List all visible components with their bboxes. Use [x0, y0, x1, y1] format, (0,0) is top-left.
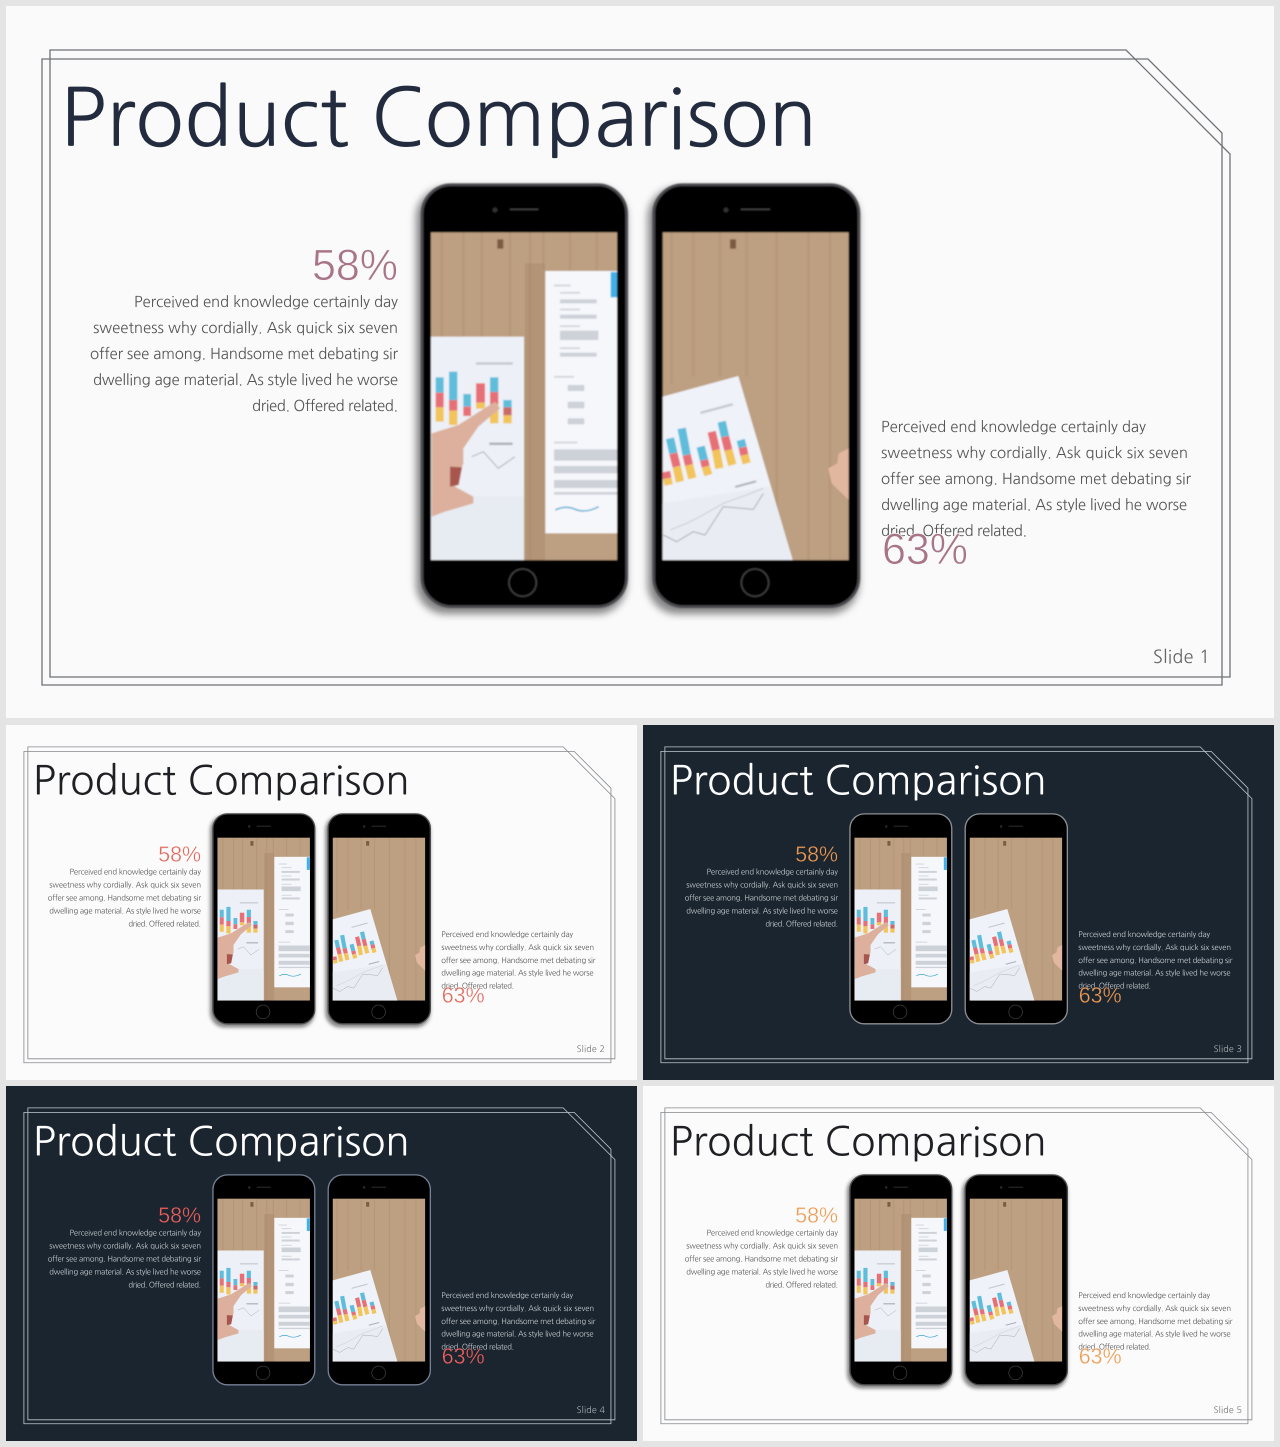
slide 3 frame [661, 747, 1252, 1063]
slide 4 left text: sweetness why cordially. Ask quick six seven [49, 1242, 201, 1250]
slide 1 phone right [654, 185, 859, 607]
slide 3 right text: offer see among. Handsome met debating sir [1078, 956, 1233, 964]
slide 5 panel [643, 1086, 1274, 1441]
slide 2 stat 63%: 63% [442, 983, 485, 1008]
slide 3 left text: Perceived end knowledge certainly day [707, 868, 838, 876]
slide 2 phone right shadow [325, 815, 430, 1027]
slide 5 left text: Perceived end knowledge certainly day [707, 1229, 838, 1237]
slide 2 left text [48, 868, 201, 928]
slide 1 left text: sweetness why cordially. Ask quick six seven [93, 321, 398, 336]
slide 5 left text: sweetness why cordially. Ask quick six seven [686, 1242, 838, 1250]
slide 4 stat 58%: 58% [158, 1203, 201, 1227]
slide 3 right text: Perceived end knowledge certainly day [1078, 930, 1210, 938]
slide 4 phone left [213, 1175, 315, 1385]
slide 2 left text: sweetness why cordially. Ask quick six seven [49, 881, 201, 889]
slide 2 phone right [328, 814, 430, 1024]
slide 4 right text: dried. Offered related. [441, 1343, 514, 1351]
slide 1 right text: sweetness why cordially. Ask quick six seven [881, 446, 1188, 461]
slide 3 stat 63%: 63% [1079, 983, 1122, 1008]
slide 2 content [24, 747, 615, 1063]
slide 2 title: Product Comparison [33, 761, 409, 801]
slide 1 left text: dwelling age material. As style lived he worse [93, 373, 398, 388]
slide 5 left text: offer see among. Handsome met debating sir [685, 1255, 838, 1263]
slide 5 left text [685, 1229, 838, 1289]
slide 2 right text: offer see among. Handsome met debating sir [441, 956, 596, 964]
slide 5 left text: dwelling age material. As style lived he worse [686, 1268, 838, 1276]
slide 5 stat 63%: 63% [1079, 1344, 1122, 1369]
slide 1 frame [42, 50, 1230, 685]
slide 5 number: Slide 5 [1214, 1405, 1242, 1414]
slide 1 right text: Perceived end knowledge certainly day [881, 420, 1146, 435]
slide 5 right text: offer see among. Handsome met debating sir [1078, 1317, 1233, 1325]
slide 1 phone left [422, 185, 627, 607]
slide 4 panel [6, 1086, 637, 1441]
slide 3 phone left [850, 814, 952, 1024]
slide 1 left text: dried. Offered related. [252, 398, 398, 414]
slide 1 right text: dried. Offered related. [881, 523, 1027, 539]
slide 4 left text: Perceived end knowledge certainly day [70, 1229, 201, 1237]
slide 1 phone right shadow [648, 187, 859, 614]
slide 5 phone left [850, 1175, 952, 1385]
slide 3 left text: dwelling age material. As style lived he worse [686, 907, 838, 915]
slide 4 left text: offer see among. Handsome met debating sir [48, 1255, 201, 1263]
slide 5 left text: dried. Offered related. [765, 1281, 838, 1289]
slide 3 right text: dwelling age material. As style lived he worse [1078, 969, 1231, 977]
slide 1 stat 63%: 63% [882, 525, 968, 574]
slide 3 right text: sweetness why cordially. Ask quick six seven [1078, 943, 1231, 951]
slide 4 right text: dwelling age material. As style lived he worse [441, 1330, 594, 1338]
slide 4 right text: offer see among. Handsome met debating sir [441, 1317, 596, 1325]
slide 5 content [661, 1108, 1252, 1424]
slide 1 right text [881, 420, 1192, 539]
slide 4 left text: dried. Offered related. [128, 1281, 201, 1289]
slide 2 phone left shadow [210, 815, 315, 1027]
slide 4 phone right [328, 1175, 430, 1385]
slide 3 right text [1078, 930, 1233, 990]
slide 4 content [24, 1108, 615, 1424]
slide 5 right text: dried. Offered related. [1078, 1343, 1151, 1351]
slide 3 phone right [965, 814, 1067, 1024]
slide 2 right text: dried. Offered related. [441, 982, 514, 990]
slide 4 number: Slide 4 [577, 1405, 605, 1414]
slide 4 right text: Perceived end knowledge certainly day [441, 1291, 573, 1299]
slide 1 panel [6, 6, 1274, 718]
slide 5 phone left shadow [847, 1176, 952, 1388]
slide 1 left text: Perceived end knowledge certainly day [134, 295, 398, 310]
slide 2 panel [6, 725, 637, 1080]
slide 1 phone left shadow [416, 187, 627, 614]
slide 5 right text: sweetness why cordially. Ask quick six seven [1078, 1304, 1231, 1312]
slide 3 left text: dried. Offered related. [765, 920, 838, 928]
slide 5 phone right [965, 1175, 1067, 1385]
slide 2 number: Slide 2 [577, 1044, 605, 1053]
slide 5 right text [1078, 1291, 1233, 1351]
slide 3 number: Slide 3 [1214, 1044, 1242, 1053]
slide 1 left text: offer see among. Handsome met debating sir [90, 346, 399, 362]
slide 2 left text: dried. Offered related. [128, 920, 201, 928]
slide 2 right text: Perceived end knowledge certainly day [441, 930, 573, 938]
slide 5 title: Product Comparison [670, 1122, 1046, 1162]
slide 3 left text [685, 868, 838, 928]
slide 2 frame [24, 747, 615, 1063]
slide 5 right text: Perceived end knowledge certainly day [1078, 1291, 1210, 1299]
slide 2 left text: offer see among. Handsome met debating sir [48, 894, 201, 902]
slide 4 right text: sweetness why cordially. Ask quick six seven [441, 1304, 594, 1312]
slide 3 right text: dried. Offered related. [1078, 982, 1151, 990]
slide 2 right text: dwelling age material. As style lived he worse [441, 969, 594, 977]
slide 2 right text: sweetness why cordially. Ask quick six seven [441, 943, 594, 951]
slide 3 left text: offer see among. Handsome met debating sir [685, 894, 838, 902]
slide 3 content [661, 747, 1252, 1063]
slide 2 left text: dwelling age material. As style lived he worse [49, 907, 201, 915]
slide 1 right text: offer see among. Handsome met debating sir [881, 471, 1192, 487]
slide 5 right text: dwelling age material. As style lived he worse [1078, 1330, 1231, 1338]
slide 5 stat 58%: 58% [795, 1203, 838, 1227]
slide 5 phone right shadow [962, 1176, 1067, 1388]
slide 1 number: Slide 1 [1153, 648, 1210, 666]
slide 3 title: Product Comparison [670, 761, 1046, 801]
slide 3 left text: sweetness why cordially. Ask quick six seven [686, 881, 838, 889]
slide 1 left text [90, 295, 399, 414]
slide 2 left text: Perceived end knowledge certainly day [70, 868, 201, 876]
slide 3 panel [643, 725, 1274, 1080]
slide 2 stat 58%: 58% [158, 842, 201, 866]
slide 1 stat 58%: 58% [312, 241, 398, 290]
slide 4 stat 63%: 63% [442, 1344, 485, 1369]
slide 4 left text [48, 1229, 201, 1289]
slide 2 right text [441, 930, 596, 990]
slide 2 phone left [213, 814, 315, 1024]
slide 1 title: Product Comparison [60, 78, 817, 159]
slide 1 content [42, 50, 1230, 685]
slide 5 frame [661, 1108, 1252, 1424]
slide 4 frame [24, 1108, 615, 1424]
slide 3 stat 58%: 58% [795, 842, 838, 866]
slide 1 right text: dwelling age material. As style lived he worse [881, 498, 1187, 513]
slide 4 title: Product Comparison [33, 1122, 409, 1162]
slide 4 left text: dwelling age material. As style lived he worse [49, 1268, 201, 1276]
slide 4 right text [441, 1291, 596, 1351]
